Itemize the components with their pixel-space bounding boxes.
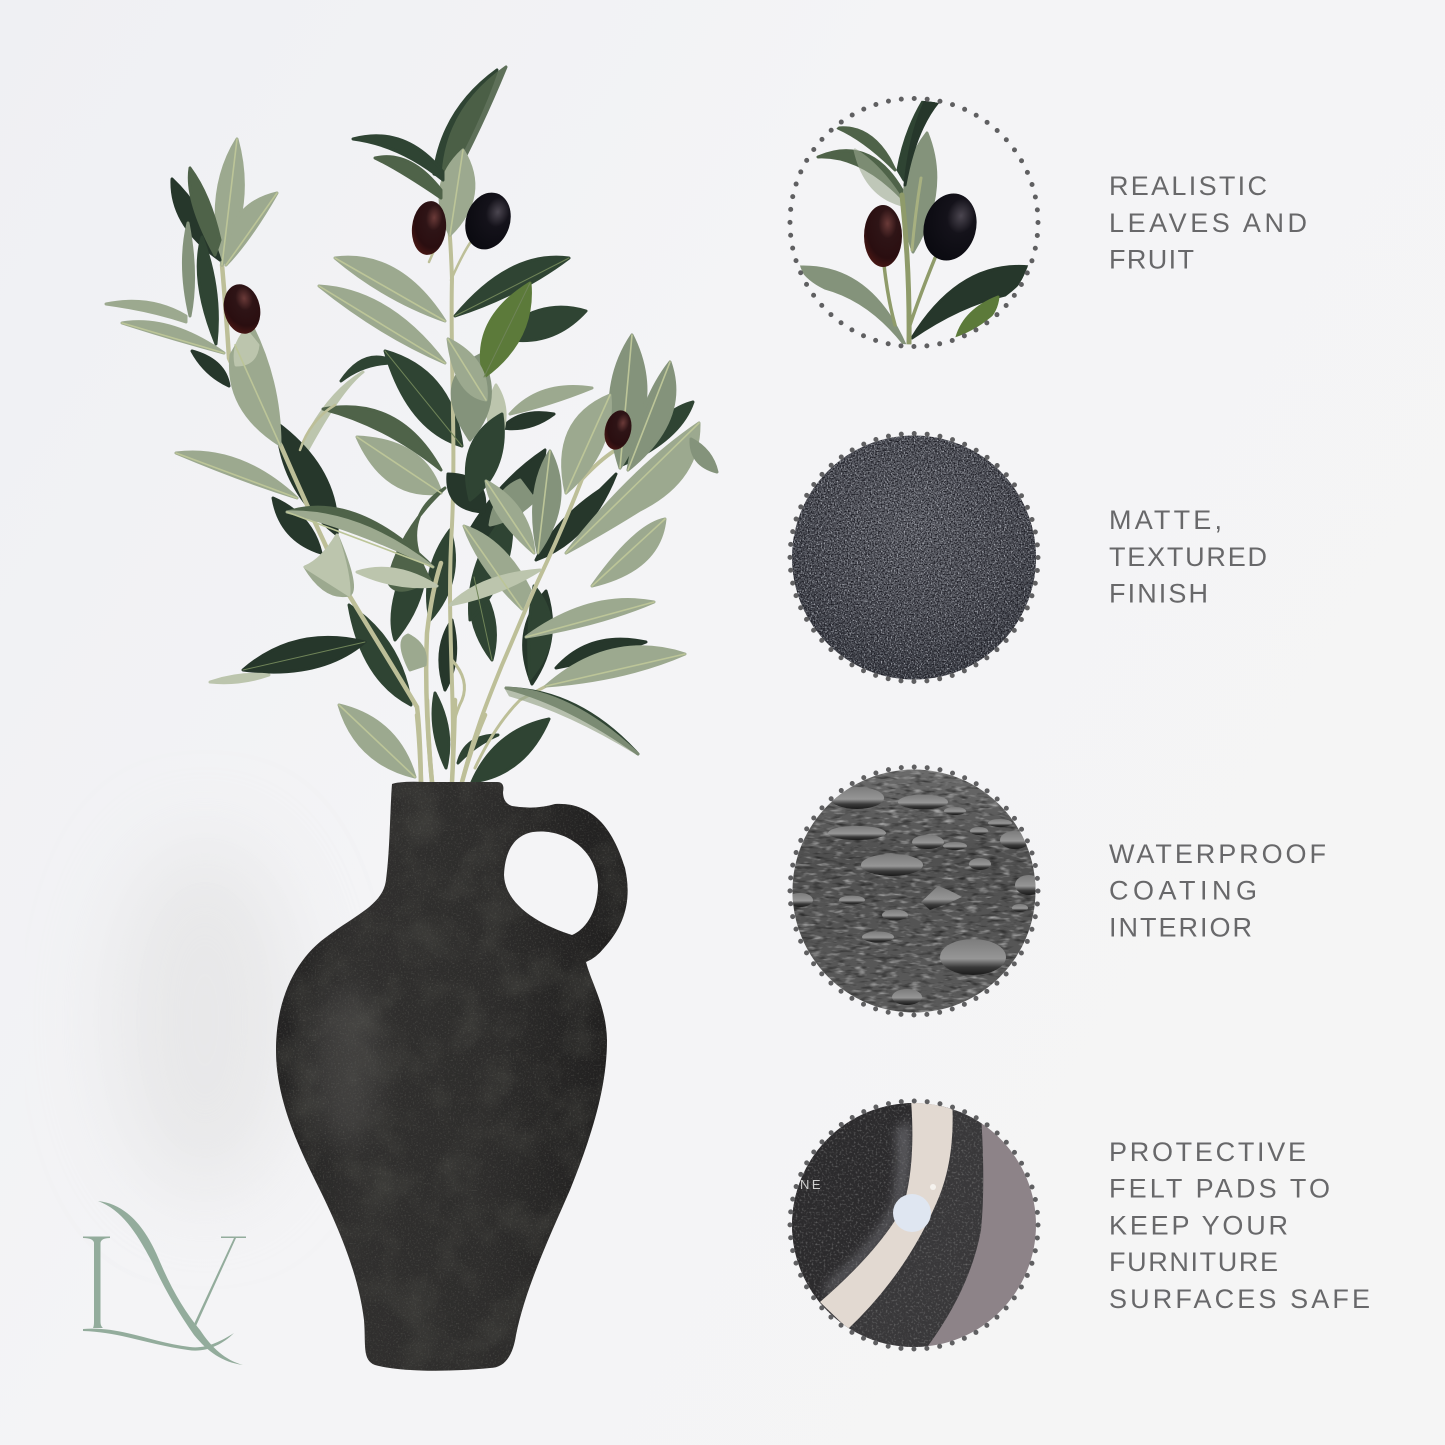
label: KEEP YOUR: [1109, 1210, 1288, 1240]
printed letters on vase base: NE: [800, 1177, 823, 1192]
feature 1: realistic leaves and fruit: [790, 98, 1307, 346]
label: TEXTURED: [1109, 542, 1267, 572]
detail circle: vase underside with felt pad: [790, 1100, 1040, 1350]
olive: left branch: [219, 281, 265, 337]
feature 2: matte textured finish: [790, 434, 1267, 682]
label: [1109, 505, 1267, 608]
olive: right branch: [601, 407, 635, 453]
label: FURNITURE: [1109, 1247, 1278, 1277]
logo: LV monogram: [83, 1201, 246, 1365]
vase: [276, 782, 628, 1371]
label: FRUIT: [1109, 244, 1194, 274]
feature 3: waterproof coating interior: [787, 767, 1326, 1015]
label: [1109, 1137, 1370, 1314]
olive: branch centre, black: [458, 187, 518, 255]
vase shadow: [115, 840, 295, 1200]
olive: branch centre, reddish: [409, 199, 449, 257]
detail circle: water droplets: [787, 767, 1043, 1015]
label: SURFACES SAFE: [1109, 1284, 1370, 1314]
label: WATERPROOF: [1109, 839, 1326, 869]
feature 4: protective felt pads: [790, 1100, 1370, 1350]
detail circle: olive sprig: [790, 98, 1038, 346]
detail circle: textured surface: [790, 434, 1038, 682]
label: [1109, 839, 1326, 942]
label: PROTECTIVE: [1109, 1137, 1306, 1167]
label: [1109, 171, 1307, 274]
olive branches: [106, 67, 717, 782]
label: REALISTIC: [1109, 171, 1267, 201]
label: FINISH: [1109, 578, 1208, 608]
label: COATING: [1109, 876, 1257, 906]
label: FELT PADS TO: [1109, 1174, 1330, 1204]
label: MATTE,: [1109, 505, 1222, 535]
label: LEAVES AND: [1109, 208, 1307, 238]
label: INTERIOR: [1109, 912, 1252, 942]
main stems: [222, 190, 614, 782]
